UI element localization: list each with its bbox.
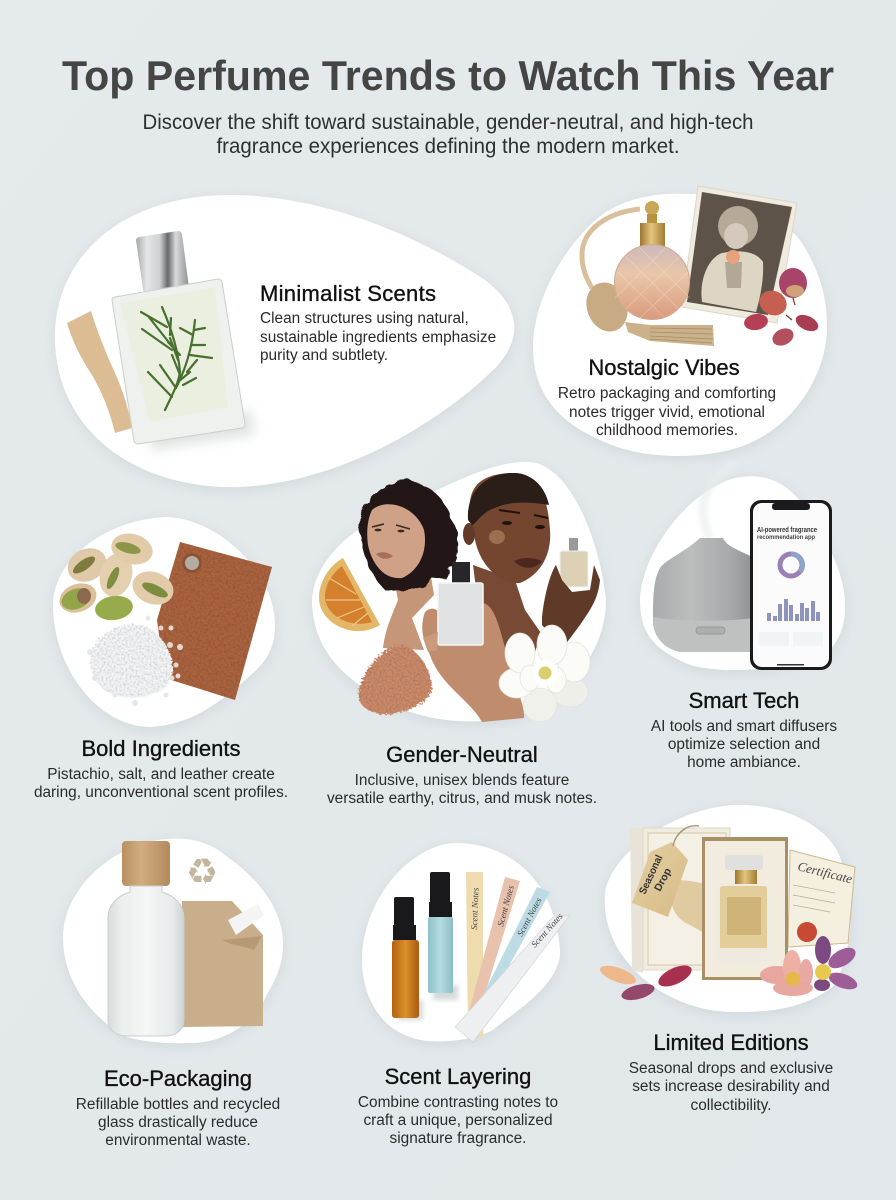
text block [358,1094,558,1147]
text block: glass drastically reduce [98,1114,258,1131]
icon: woman with shaved head [463,473,550,668]
text block [34,766,288,801]
icon: kraft refill pouch [182,901,264,1027]
icon: smartphone app: recommendation app [757,534,815,541]
icon: seasonal drop tag [632,826,699,917]
icon: seasonal drop tag: Drop [652,866,674,893]
icon: certificate: Certificate [796,858,854,886]
heading: Bold Ingredients [82,736,240,761]
panel: bold ingredients [34,517,288,801]
icon: rosemary sprig [141,307,212,410]
text block: daring, unconventional scent profiles. [34,784,288,801]
subtitle: fragrance experiences defining the modern market. [216,135,680,158]
icon: scent strips: Scent Notes [515,896,544,938]
icon: palo santo wood [67,311,132,433]
heading: Smart Tech [689,688,799,713]
text block [76,1096,280,1149]
icon: hand with small bottle [542,538,600,645]
text block: Retro packaging and comforting [558,385,776,402]
text block: Seasonal drops and exclusive [629,1060,833,1077]
heading: Minimalist Scents [260,281,436,306]
icon: gold perfume bottle [719,855,768,962]
panel: scent layering [358,843,570,1147]
icon: scent strips: Scent Notes [529,911,565,949]
text block: signature fragrance. [390,1130,526,1147]
text block: Inclusive, unisex blends feature [355,772,569,789]
icon: glass refill bottle [108,841,184,1036]
text block: versatile earthy, citrus, and musk notes. [327,790,597,807]
panel: smart tech [640,462,845,771]
icon: smart diffuser [653,462,762,652]
text block: AI tools and smart diffusers [651,718,837,735]
icon: woman with curly hair [359,481,458,650]
icon: scent strips: Scent Notes [469,887,480,930]
icon: atomizer bottle [580,201,714,346]
heading: Limited Editions [653,1030,809,1055]
icon: smartphone app: AI-powered fragrance [757,527,817,534]
icon: pistachios [55,529,178,623]
text block: sustainable ingredients emphasize [260,329,496,346]
subtitle [142,111,754,158]
icon: white flower [499,625,590,722]
text block: purity and subtlety. [260,347,388,364]
title: Top Perfume Trends to Watch This Year [62,52,834,99]
text block [327,772,597,807]
panel: nostalgic vibes [533,186,827,456]
icon: minimalist perfume bottle [112,231,255,450]
icon: seasonal drop tag: Seasonal [637,853,665,896]
icon: scent strips [455,872,570,1042]
heading: Eco-Packaging [104,1066,252,1091]
text block [558,385,776,439]
text block: optimize selection and [668,736,820,753]
panel: minimalist scents [55,195,514,487]
text block: Refillable bottles and recycled [76,1096,280,1113]
panel: limited editions [598,805,859,1114]
text block: home ambiance. [687,754,801,771]
text block [651,718,837,771]
icon: scent strips: Scent Notes [495,884,516,928]
icon: vintage photo [682,186,797,323]
icon: blue vial [428,872,458,1000]
subtitle: Discover the shift toward sustainable, gender-neutral, and high-tech [142,111,754,134]
icon: leather swatch [157,542,272,700]
text block [260,310,496,364]
heading: Nostalgic Vibes [588,355,740,380]
text block: craft a unique, personalized [363,1112,553,1129]
text block: environmental waste. [105,1132,251,1149]
icon: salt pile [87,616,183,706]
icon: recycling symbol: ♻ [186,852,218,893]
icon: orange slice [319,558,380,631]
heading: Scent Layering [385,1064,531,1089]
text block: sets increase desirability and [632,1078,830,1095]
icon: petals and flowers [598,936,859,1003]
text block: childhood memories. [596,422,738,439]
icon: clay powder [358,645,432,714]
icon: smartphone app [750,500,832,670]
icon: certificate [788,850,855,947]
text block: Clean structures using natural, [260,310,469,327]
icon: hand holding bottle [422,562,524,722]
icon: gift box [630,828,788,980]
panel: gender-neutral [312,462,606,807]
text block: collectibility. [691,1097,771,1114]
icon: amber vial [392,897,423,1020]
text block [629,1060,833,1114]
icon: dried roses [743,268,821,349]
text block: Combine contrasting notes to [358,1094,558,1111]
panel: eco-packaging [63,838,283,1149]
heading: Gender-Neutral [386,742,538,767]
text block: Pistachio, salt, and leather create [47,766,275,783]
text block: notes trigger vivid, emotional [569,404,765,421]
